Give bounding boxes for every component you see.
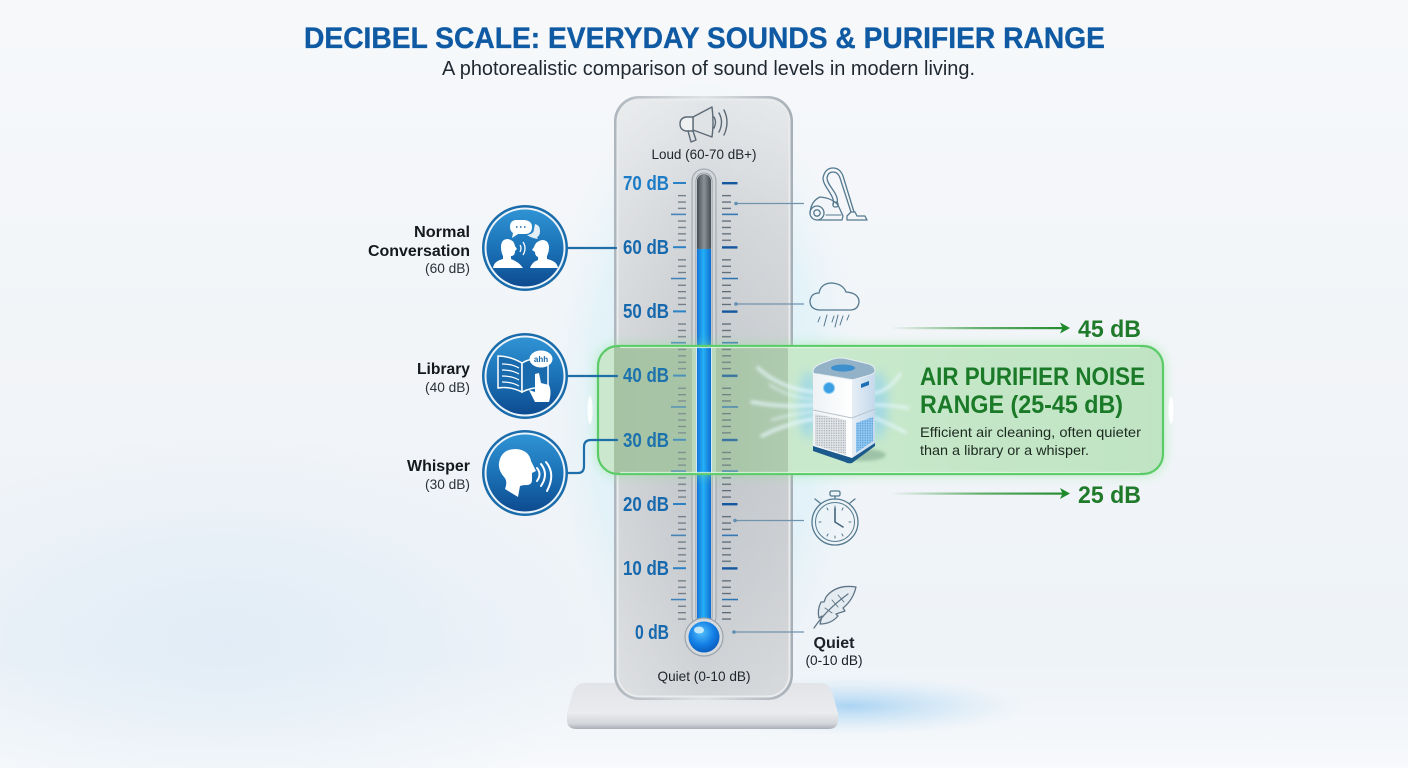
scale labels: 20 dB [623, 494, 669, 516]
normal conversation label: Conversation [368, 243, 470, 260]
band heading [920, 363, 1145, 419]
band description: Efficient air cleaning, often quieter [920, 424, 1141, 440]
band scale labels: 30 dB [623, 430, 669, 452]
whisper label: (30 dB) [425, 477, 470, 492]
thermometer panel [614, 96, 793, 700]
whisper item [407, 430, 568, 516]
air flow streaks [752, 368, 908, 439]
band scale labels: 40 dB [623, 365, 669, 387]
loud label: Loud (60-70 dB+) [652, 146, 756, 162]
quiet side label [806, 635, 862, 668]
band description [920, 424, 1141, 458]
band scale ticks [670, 347, 739, 473]
mercury column [697, 249, 711, 629]
right leader lines [732, 202, 804, 634]
scale labels: 10 dB [623, 558, 669, 580]
icon: book and hand [482, 333, 568, 419]
arrow: 25 dB lower bound: 25 dB [1078, 482, 1141, 509]
icon: whispering head [482, 430, 568, 516]
subtitle: A photorealistic comparison of sound levels in modern living. [442, 58, 975, 80]
quiet side label: Quiet [814, 635, 855, 652]
purifier range band [588, 345, 1174, 475]
title: DECIBEL SCALE: EVERYDAY SOUNDS & PURIFIER RANGE [304, 22, 1105, 55]
library label [417, 361, 470, 395]
quiet panel label: Quiet (0-10 dB) [658, 668, 750, 684]
normal conversation item [368, 205, 568, 291]
icon: conversation [482, 205, 568, 291]
band heading: AIR PURIFIER NOISE [920, 363, 1145, 391]
quiet side label: (0-10 dB) [806, 652, 862, 668]
normal conversation label: Normal [414, 224, 470, 241]
scale labels: 50 dB [623, 301, 669, 323]
band tube [692, 345, 716, 475]
library label: (40 dB) [425, 380, 470, 395]
icon: feather [814, 586, 856, 628]
connectors [567, 248, 617, 473]
air purifier [813, 358, 886, 463]
scale labels: 70 dB [623, 173, 669, 195]
whisper label: Whisper [407, 458, 470, 475]
stand base [567, 683, 838, 729]
band description: than a library or a whisper. [920, 442, 1089, 458]
normal conversation label [368, 224, 470, 276]
scale labels: 60 dB [623, 237, 669, 259]
icon: book and hand: ahh [534, 355, 548, 364]
band scale labels [623, 365, 669, 452]
normal conversation label: (60 dB) [425, 261, 470, 276]
whisper label [407, 458, 470, 492]
icon: stopwatch clock [812, 491, 858, 545]
arrow: 45 dB upper bound: 45 dB [1078, 316, 1141, 343]
scale labels [623, 173, 669, 644]
icon: megaphone [680, 107, 727, 142]
library item [417, 333, 568, 419]
library label: Library [417, 361, 470, 378]
scale ticks [670, 180, 739, 622]
icon: rain cloud [810, 283, 859, 327]
bulb [688, 622, 720, 652]
band heading: RANGE (25-45 dB) [920, 391, 1123, 419]
thermometer tube [685, 169, 723, 656]
arrow: 45 dB upper bound [890, 316, 1141, 343]
scale labels: 0 dB [635, 622, 669, 644]
arrow: 25 dB lower bound [890, 482, 1141, 509]
icon: vacuum cleaner [810, 168, 867, 220]
